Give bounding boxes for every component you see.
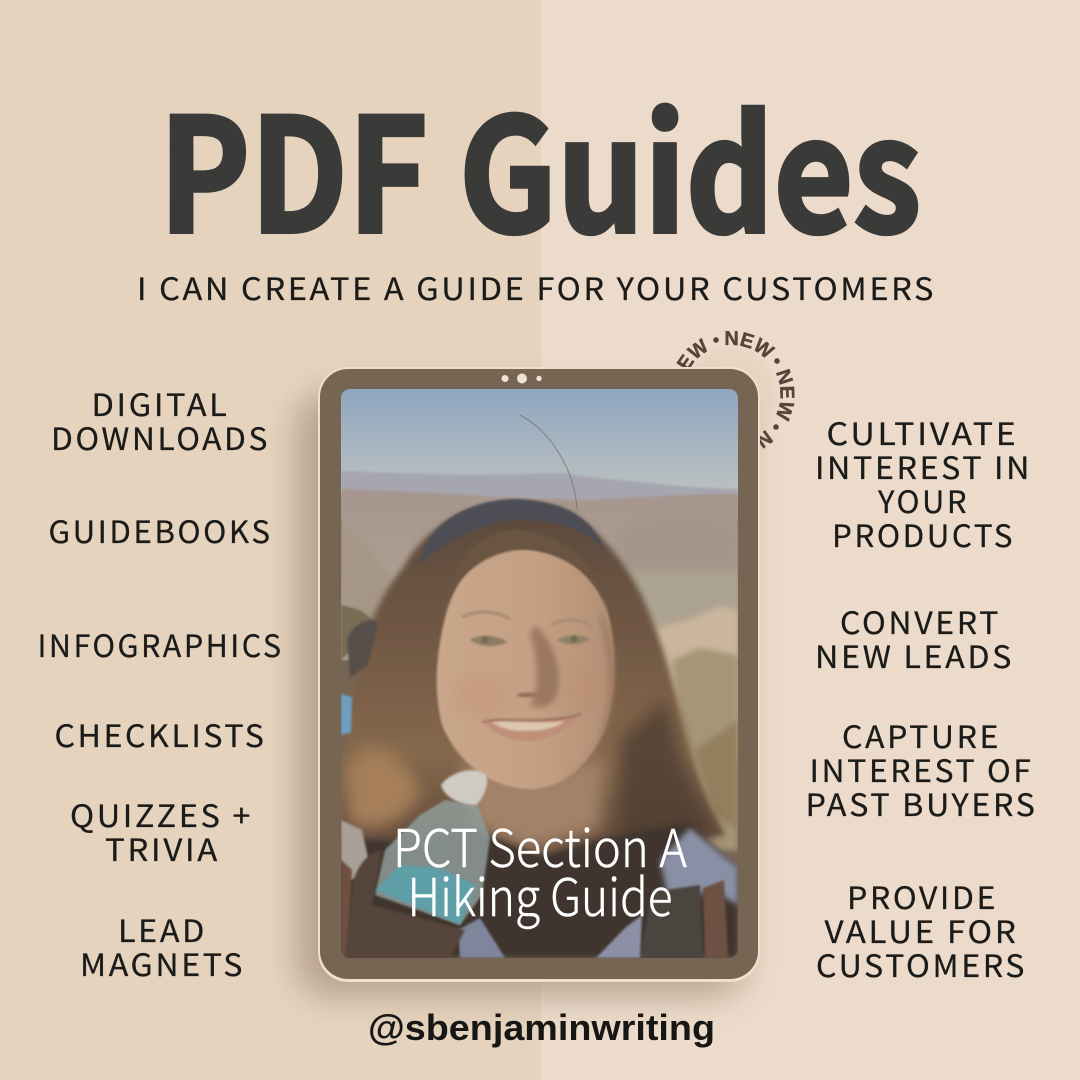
sunglasses xyxy=(421,499,605,564)
tablet camera dots xyxy=(502,374,542,384)
label: digital downloads xyxy=(51,380,270,459)
desert brush xyxy=(672,648,738,850)
tablet caption: PCT Section A xyxy=(393,807,687,882)
arm skin right xyxy=(703,880,728,958)
shoulder skin xyxy=(341,860,352,958)
right face shading xyxy=(597,616,614,742)
stray hair xyxy=(520,415,577,510)
social handle: @sbenjaminwriting xyxy=(368,1007,715,1048)
dark cap behind shoulder xyxy=(347,620,378,678)
label: provide value xyxy=(816,873,1027,986)
label: capture interest: INTEREST OF xyxy=(810,746,1034,791)
smile xyxy=(484,718,574,741)
label: cultivate interest: INTEREST IN xyxy=(815,443,1032,488)
circular NEW badge: NEW xyxy=(676,338,708,367)
dark shirt fold xyxy=(640,885,703,958)
middle mountains xyxy=(341,489,738,660)
sunlit hair ends xyxy=(345,748,420,827)
label: capture interest: CAPTURE xyxy=(842,712,1001,757)
label: cultivate interest: YOUR xyxy=(877,477,969,522)
circular NEW badge: NEW xyxy=(760,430,774,449)
eyebrows xyxy=(462,612,510,619)
water bottle xyxy=(375,800,490,925)
label: infographics: INFOGRAPHICS xyxy=(38,621,284,666)
label: lead magnets: LEAD xyxy=(118,906,207,951)
nose shadow xyxy=(530,625,559,707)
bottle cap xyxy=(441,770,487,805)
label: convert new leads xyxy=(815,598,1014,677)
tablet device xyxy=(296,367,760,997)
blue pack strap xyxy=(341,694,352,735)
eyes xyxy=(470,636,508,646)
circular NEW badge: NEW xyxy=(726,331,776,358)
label: guidebooks: GUIDEBOOKS xyxy=(48,507,272,552)
label: quizzes and trivia: QUIZZES + xyxy=(70,791,253,836)
label: convert new leads: NEW LEADS xyxy=(815,632,1014,677)
label: provide value: CUSTOMERS xyxy=(816,941,1027,986)
hair xyxy=(341,505,725,850)
tablet frame xyxy=(318,367,760,982)
label: quizzes and trivia xyxy=(70,791,253,870)
cheeks xyxy=(466,686,488,702)
valley floor xyxy=(737,574,738,611)
label: cultivate interest: CULTIVATE xyxy=(826,409,1018,454)
photo: hiker selfie on mountain ridge xyxy=(341,389,738,958)
circular NEW badge: NEW xyxy=(776,368,795,422)
circular NEW badge xyxy=(676,331,795,449)
mesh pocket xyxy=(345,850,465,958)
label: digital downloads: DOWNLOADS xyxy=(51,414,270,459)
face xyxy=(437,549,615,789)
label: cultivate interest: PRODUCTS xyxy=(832,511,1015,556)
left foreground hill xyxy=(341,604,373,660)
label: digital downloads: DIGITAL xyxy=(92,380,230,425)
label: capture interest: PAST BUYERS xyxy=(806,780,1038,825)
label: cultivate interest xyxy=(815,409,1032,556)
dark hair on right xyxy=(620,700,715,850)
foreground hill xyxy=(650,606,738,760)
sky xyxy=(341,389,738,499)
nose tip xyxy=(517,692,537,698)
white strap xyxy=(341,820,372,880)
label: quizzes and trivia: TRIVIA xyxy=(105,825,220,870)
title: PDF Guides xyxy=(159,51,921,278)
label: checklists: CHECKLISTS xyxy=(54,711,266,756)
tablet shadow xyxy=(296,392,746,997)
label: lead magnets: MAGNETS xyxy=(80,940,245,985)
hair over forehead xyxy=(458,531,607,610)
blue shirt bottom xyxy=(458,918,505,958)
distant mountains xyxy=(341,471,738,520)
label: provide value: VALUE FOR xyxy=(824,907,1018,952)
label: capture interest xyxy=(806,712,1038,825)
shirt xyxy=(341,822,738,958)
subtitle: I CAN CREATE A GUIDE FOR YOUR CUSTOMERS xyxy=(137,264,936,309)
left column: guide formats xyxy=(38,380,284,985)
neck xyxy=(462,760,605,850)
tablet caption xyxy=(393,807,687,931)
blue shirt right xyxy=(660,828,738,905)
tablet caption: Hiking Guide xyxy=(408,856,672,931)
label: provide value: PROVIDE xyxy=(847,873,998,918)
right column: benefits xyxy=(806,409,1038,986)
label: lead magnets xyxy=(80,906,245,985)
label: convert new leads: CONVERT xyxy=(840,598,1001,643)
